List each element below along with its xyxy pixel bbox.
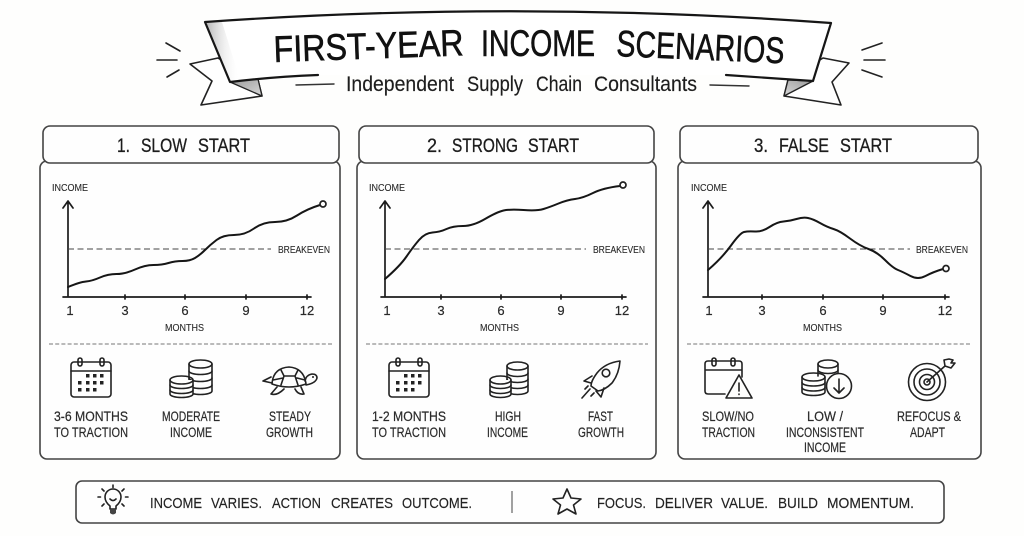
line chart: strong start: 1: [383, 303, 391, 318]
footer text right: BUILD: [778, 495, 818, 512]
line chart: slow start: 9: [242, 303, 250, 318]
subtitle: Independent: [346, 73, 454, 96]
subtitle: Chain: [536, 73, 582, 96]
subtitle: Consultants: [594, 73, 697, 96]
right fold: [784, 80, 813, 96]
label: income: INCOME: [487, 424, 528, 440]
panel heading: FALSE: [779, 135, 829, 157]
panel heading: 3.: [754, 135, 768, 157]
label: growth: STEADY: [269, 408, 311, 424]
title: FIRST-YEAR: [273, 22, 464, 70]
line chart: false start: [691, 182, 968, 334]
left ribbon tail: [190, 58, 262, 105]
label: growth: GROWTH: [266, 424, 313, 440]
footer text left: VARIES.: [211, 495, 262, 512]
icon: calendar: [389, 358, 429, 397]
panel heading: SLOW: [141, 135, 187, 157]
panel heading: STRONG: [452, 135, 518, 157]
icon: coins with down arrow: [802, 360, 852, 398]
line chart: slow start: MONTHS: [165, 322, 204, 334]
title: INCOME: [481, 23, 595, 64]
right sparkle rays: [862, 43, 885, 77]
banner outline: [205, 11, 831, 82]
footer text left: CREATES: [331, 495, 393, 512]
line chart: false start: BREAKEVEN: [916, 244, 968, 256]
line chart: strong start: 9: [557, 303, 565, 318]
label: income: LOW /: [807, 408, 843, 424]
label: income: INCOME: [804, 439, 846, 455]
label: income: INCONSISTENT: [786, 424, 864, 440]
line chart: slow start: 1: [66, 303, 74, 318]
left fold: [230, 79, 262, 96]
subtitle rules: [296, 84, 749, 86]
panel heading: START: [528, 135, 579, 157]
panel body: [40, 161, 340, 459]
icon: star: [553, 489, 581, 514]
line chart: false start: 12: [938, 303, 952, 318]
icon: coin stacks: [170, 360, 212, 398]
line chart: false start: 1: [705, 303, 713, 318]
line chart: strong start: [369, 182, 645, 334]
icon: calendar: [71, 358, 111, 397]
label: growth: FAST: [588, 408, 613, 424]
footer text left: INCOME: [150, 495, 202, 512]
panel: slow start: [40, 126, 340, 459]
panel heading: 2.: [427, 135, 442, 157]
panel header: [680, 126, 978, 163]
icon: light bulb: [98, 485, 128, 514]
icon: rocket: [582, 361, 620, 398]
line chart: false start: 3: [758, 303, 766, 318]
line chart: false start: MONTHS: [803, 322, 842, 334]
right ribbon tail: [784, 58, 849, 105]
label: income: MODERATE: [162, 408, 220, 424]
left sparkle rays: [157, 43, 180, 77]
line chart: false start: 6: [819, 303, 827, 318]
panel: strong start: [357, 126, 656, 459]
label: income: INCOME: [170, 424, 212, 440]
panel body: [357, 161, 656, 459]
title: [273, 22, 785, 71]
title banner: [157, 11, 885, 105]
panel header: [43, 126, 339, 163]
line chart: slow start: 6: [181, 303, 189, 318]
panel heading: 1.: [117, 135, 130, 157]
line chart: false start: 9: [879, 303, 887, 318]
label: traction: SLOW/NO: [702, 408, 754, 424]
line chart: strong start: 3: [437, 303, 445, 318]
title: SCENARIOS: [616, 23, 785, 71]
panel header: [359, 126, 654, 163]
footer callout: [76, 481, 944, 523]
icon: turtle: [263, 367, 317, 394]
label: refocus: REFOCUS &: [897, 408, 962, 424]
footer box: [76, 481, 944, 523]
panel heading: START: [198, 135, 250, 157]
icon: calendar with warning: [705, 358, 752, 398]
line chart: strong start: 6: [497, 303, 505, 318]
label: traction: 3-6 MONTHS: [54, 408, 128, 424]
label: growth: GROWTH: [578, 424, 624, 440]
footer text right: MOMENTUM.: [827, 495, 914, 512]
label: refocus: ADAPT: [910, 424, 945, 440]
panel body: [678, 161, 981, 459]
line chart: strong start: INCOME: [369, 182, 405, 194]
line chart: slow start: [52, 182, 330, 334]
line chart: strong start: 12: [615, 303, 629, 318]
banner body: [205, 11, 831, 82]
label: traction: TRACTION: [702, 424, 755, 440]
icon: coin stacks: [490, 362, 528, 398]
subtitle: Supply: [467, 73, 523, 96]
line chart: slow start: BREAKEVEN: [278, 244, 330, 256]
line chart: slow start: 3: [121, 303, 129, 318]
line chart: slow start: INCOME: [52, 182, 88, 194]
label: traction: TO TRACTION: [54, 424, 128, 440]
line chart: slow start: 12: [300, 303, 314, 318]
footer text right: DELIVER: [655, 495, 713, 512]
label: traction: 1-2 MONTHS: [372, 408, 446, 424]
panel heading: START: [840, 135, 892, 157]
icon: target with arrow: [908, 359, 955, 400]
line chart: false start: INCOME: [691, 182, 727, 194]
footer text left: ACTION: [272, 495, 321, 512]
footer text right: VALUE.: [721, 495, 768, 512]
footer text left: OUTCOME.: [402, 495, 472, 512]
panel: false start: [678, 126, 981, 459]
line chart: strong start: BREAKEVEN: [593, 244, 645, 256]
label: income: HIGH: [495, 408, 521, 424]
line chart: strong start: MONTHS: [480, 322, 519, 334]
footer text right: FOCUS.: [597, 495, 646, 512]
label: traction: TO TRACTION: [372, 424, 446, 440]
banner shading: [205, 22, 240, 82]
